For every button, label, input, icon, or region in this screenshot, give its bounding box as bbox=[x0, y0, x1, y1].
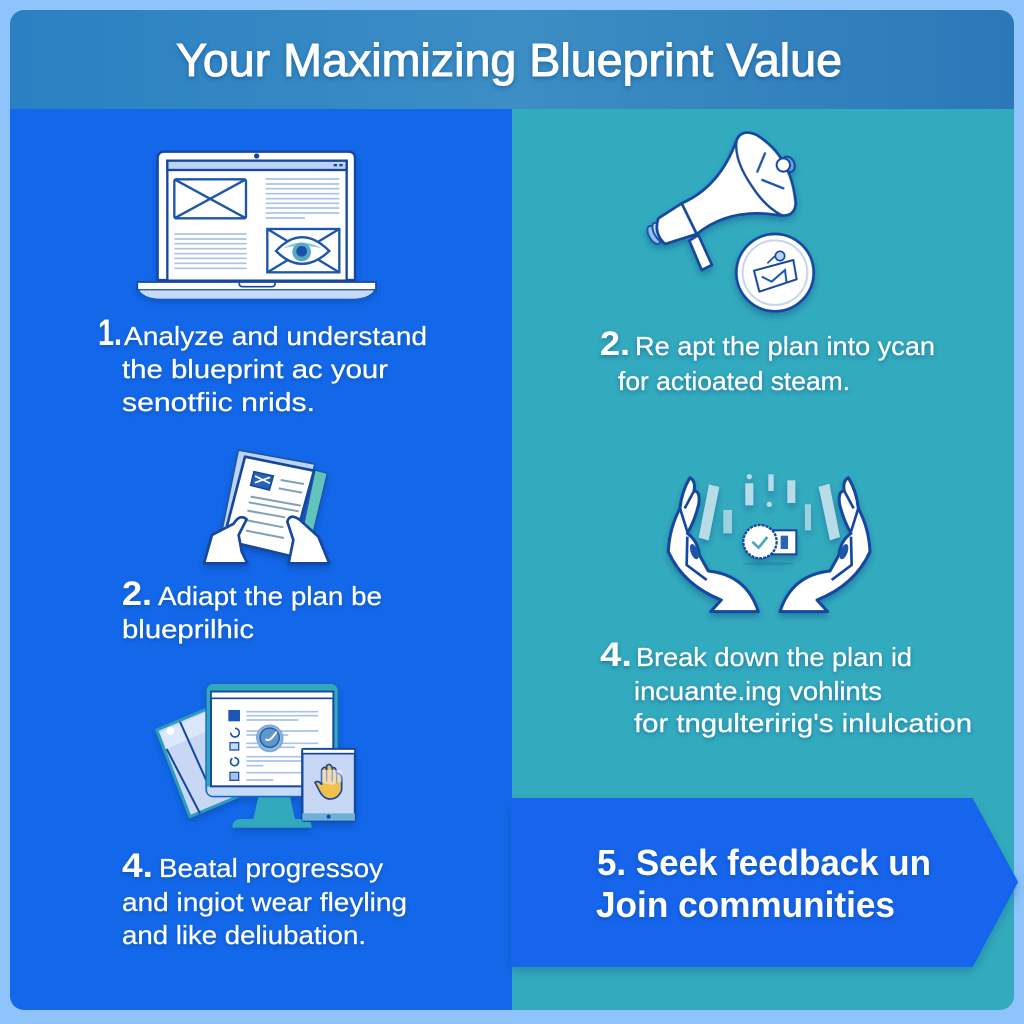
step 5 line 2: Join communities bbox=[596, 884, 895, 925]
step 4 line 3: and like deliubation. bbox=[122, 920, 366, 950]
step 2 right text bbox=[600, 325, 935, 396]
step 1 text bbox=[98, 312, 427, 417]
icon: hands holding document bbox=[204, 450, 329, 563]
step 1 line 3: senotfiic nrids. bbox=[122, 387, 315, 417]
step 2 line 1: Adiapt the plan be bbox=[158, 581, 382, 611]
step 4 line 1: Beatal progressoy bbox=[159, 853, 383, 883]
step 4 line 2: and ingiot wear fleyling bbox=[122, 887, 407, 917]
header banner bbox=[10, 10, 1014, 109]
step 2 line 2: blueprilhic bbox=[122, 614, 254, 644]
panel: right column bbox=[512, 108, 1014, 1010]
step 1 line 1: Analyze and understand bbox=[124, 321, 427, 351]
floating panels bbox=[699, 474, 840, 540]
step 4 left text bbox=[122, 847, 407, 950]
step 5 line 1: 5. Seek feedback un bbox=[597, 842, 931, 883]
panel: left column bbox=[10, 108, 512, 1010]
step 1 line 2: the blueprint ac your bbox=[122, 354, 388, 384]
step 2 left text bbox=[122, 575, 382, 644]
arrow shape bbox=[512, 799, 1017, 966]
step 4 right number: 4. bbox=[600, 636, 632, 674]
step 2 number: 2. bbox=[122, 575, 152, 613]
icon: open hands with badge bbox=[668, 474, 870, 612]
step 2 right line 2: for actioated steam. bbox=[618, 366, 850, 396]
callout: step 5 arrow banner bbox=[512, 799, 1017, 966]
step 4 right line 3: for tngulteririg's inlulcation bbox=[634, 708, 972, 738]
step 4 right text bbox=[600, 636, 972, 738]
icon: monitor, tablet and chart sheet bbox=[157, 683, 355, 828]
step 4 right line 1: Break down the plan id bbox=[636, 642, 912, 672]
icon: laptop with wireframe page bbox=[137, 152, 376, 299]
icon: megaphone with badge bbox=[645, 133, 814, 311]
step 2 right line 1: Re apt the plan into ycan bbox=[635, 331, 935, 361]
title: Your Maximizing Blueprint Value bbox=[176, 34, 842, 86]
step 4 number: 4. bbox=[122, 847, 153, 885]
step 1 number: 1. bbox=[98, 312, 122, 353]
step 4 right line 2: incuante.ing vohlints bbox=[634, 676, 882, 706]
step 2 right number: 2. bbox=[600, 325, 630, 363]
